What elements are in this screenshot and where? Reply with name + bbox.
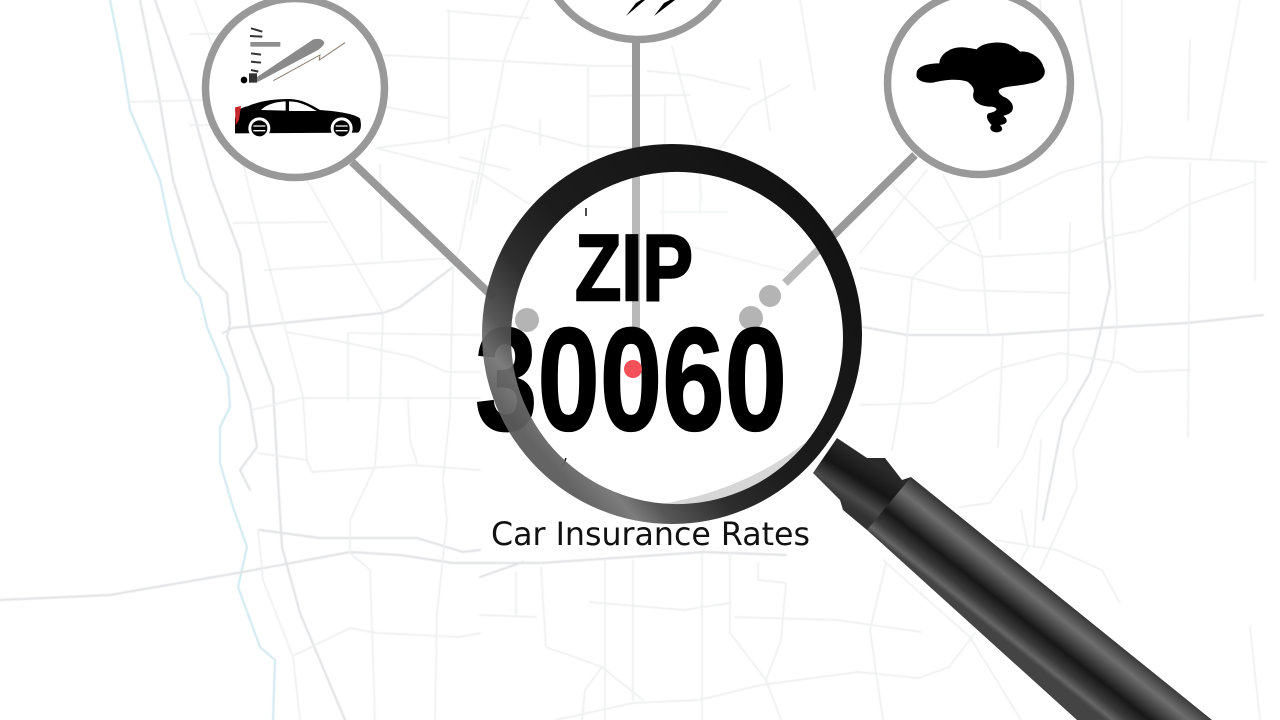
icon: lightning slashes — [626, 0, 675, 16]
icon circle: car and pen — [206, 0, 384, 178]
connector: top icon — [632, 40, 640, 328]
marker dot: right lower — [739, 306, 763, 330]
icon circle: top, cropped by the page edge — [538, 0, 738, 40]
marker dot: left — [515, 308, 539, 332]
connector: left icon — [352, 162, 494, 298]
lower right lens crescent — [662, 442, 806, 505]
zip code number: 30060 — [475, 298, 787, 462]
icon: tornado cloud — [916, 43, 1045, 132]
connector lines from icons to the center — [352, 40, 915, 328]
specks — [563, 208, 586, 466]
magnifying glass handle — [813, 438, 1212, 720]
marker dot: right upper — [759, 285, 781, 307]
subtitle: Car Insurance Rates — [491, 515, 810, 553]
lens contents — [475, 208, 787, 466]
handle neck and collar — [813, 438, 911, 530]
red location dot — [624, 360, 642, 378]
magnifier lens — [511, 172, 843, 504]
icon circle: storm cloud — [888, 0, 1070, 174]
magnifying glass rim — [482, 144, 862, 524]
connector: right icon — [785, 155, 915, 283]
rim ring — [482, 144, 862, 524]
handle grip — [867, 477, 1212, 720]
heading: ZIP: ZIP — [575, 215, 693, 320]
icon: pen with ruler ticks — [241, 28, 345, 83]
icon: black car — [235, 99, 361, 139]
river — [110, 0, 275, 720]
